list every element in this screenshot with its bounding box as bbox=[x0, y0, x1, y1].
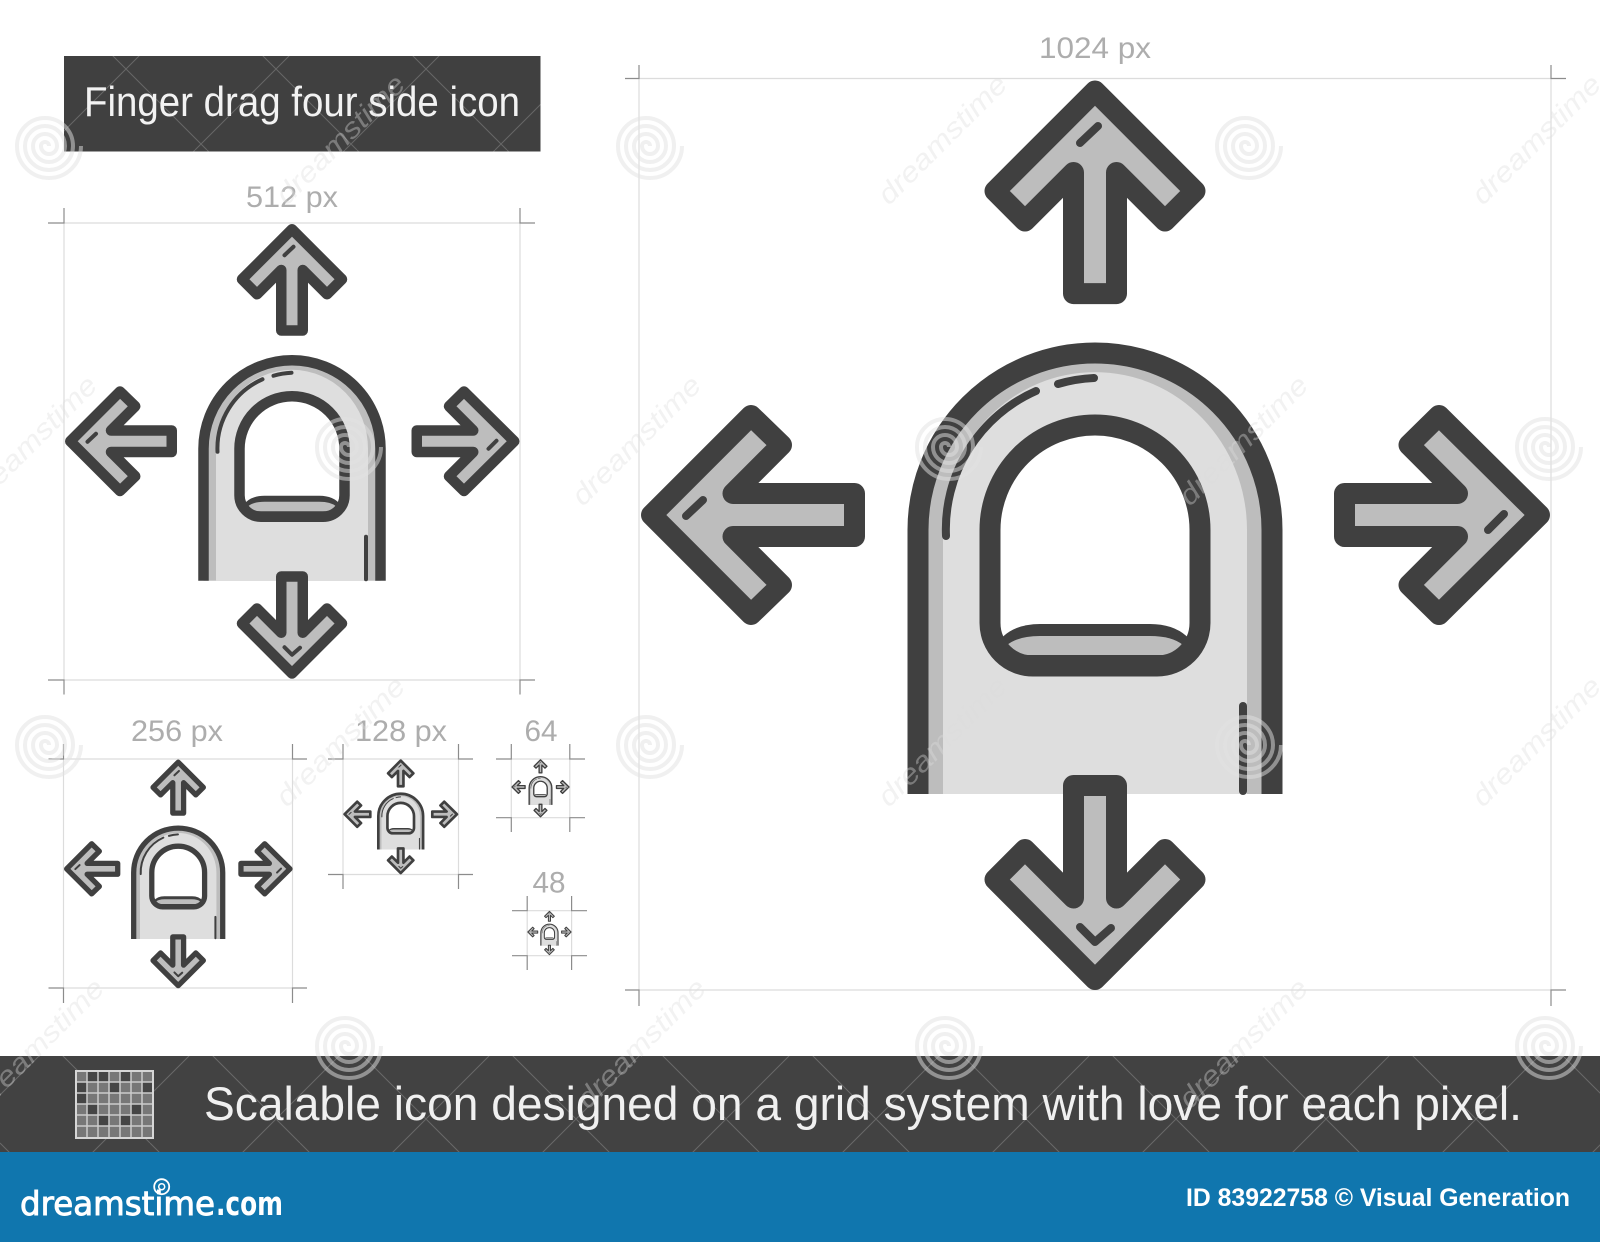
watermark text: dreamstime bbox=[1172, 369, 1314, 511]
arrow: up bbox=[995, 91, 1195, 294]
logo: dreamstime.com bbox=[20, 1179, 283, 1223]
footer: stock attribution bar bbox=[0, 1152, 1600, 1242]
label: 64: 64 bbox=[524, 715, 558, 748]
watermark text: dreamstime bbox=[269, 68, 411, 210]
panel: 64 px icon preview bbox=[496, 715, 585, 832]
watermark text: dreamstime bbox=[565, 369, 707, 511]
watermark text: dreamstime bbox=[1465, 68, 1600, 210]
panel: 256 px icon preview bbox=[48, 715, 307, 1003]
label: 512 px: 512 px bbox=[246, 181, 338, 214]
watermark text: dreamstime bbox=[269, 670, 411, 812]
watermark text: dreamstime bbox=[871, 670, 1013, 812]
label: 48: 48 bbox=[532, 866, 566, 900]
icon: 48 px bbox=[528, 911, 571, 955]
panel: 1024 px icon preview bbox=[625, 32, 1566, 1006]
icon: 256 px bbox=[67, 762, 290, 986]
watermark text: dreamstime bbox=[1172, 972, 1314, 1114]
arrow: down bbox=[995, 786, 1195, 980]
fingernail bbox=[990, 425, 1200, 668]
icon: 64 px bbox=[512, 760, 569, 817]
image id and credit: ID 83922758 © Visual Generation bbox=[1186, 1184, 1570, 1212]
icon: 128 px bbox=[345, 761, 457, 873]
watermark spirals bbox=[17, 118, 1581, 1078]
logo: dreamstime.com: .com bbox=[216, 1184, 283, 1223]
icon: finger drag four side, 1024 px bbox=[652, 91, 1540, 980]
watermark text: dreamstime bbox=[871, 68, 1013, 210]
banner: grid system statement: Scalable icon designed on a grid system with love for each pixel. bbox=[204, 1077, 1522, 1130]
arrow: right bbox=[1344, 416, 1540, 614]
icon: 512 px bbox=[70, 229, 514, 674]
watermark text: dreamstime bbox=[1465, 670, 1600, 812]
panel: 128 px icon preview bbox=[328, 715, 473, 889]
label: 128 px: 128 px bbox=[355, 715, 447, 748]
panel: 48 px icon preview bbox=[512, 866, 587, 970]
logo: dreamstime.com: dreamstime bbox=[20, 1184, 215, 1223]
finger bbox=[918, 353, 1272, 794]
label: 256 px: 256 px bbox=[131, 715, 223, 748]
title bbox=[64, 56, 540, 152]
banner: grid system statement bbox=[0, 1056, 1600, 1152]
title: Finger drag four side icon bbox=[84, 78, 520, 125]
watermark text: dreamstime bbox=[570, 972, 712, 1114]
label: 1024 px: 1024 px bbox=[1039, 32, 1151, 65]
panel: 512 px icon preview bbox=[48, 181, 535, 694]
icon: pixel grid bbox=[76, 1071, 153, 1138]
arrow: left bbox=[652, 416, 854, 614]
